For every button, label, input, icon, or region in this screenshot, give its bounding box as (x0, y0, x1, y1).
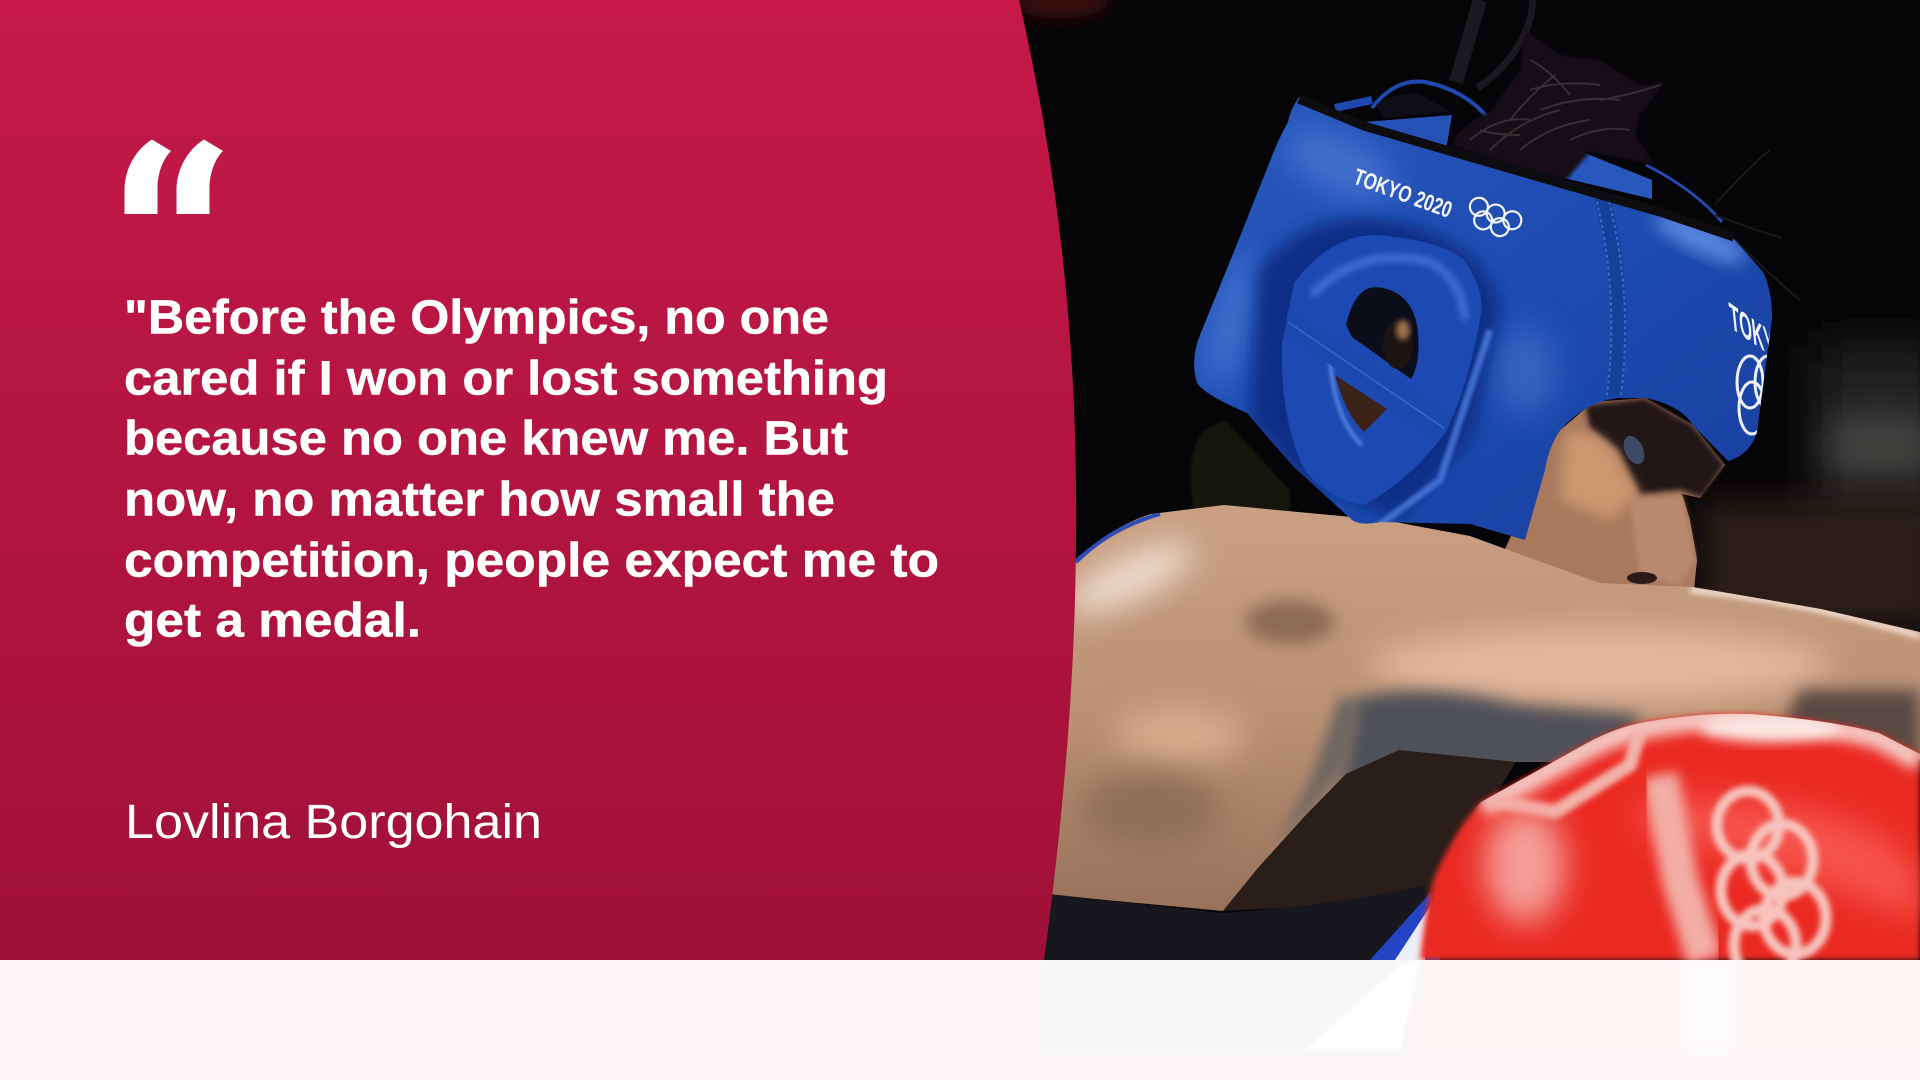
red glove (1420, 714, 1920, 981)
torso and arm (1030, 505, 1920, 911)
photo background (1000, 0, 1920, 960)
quote text: because no one knew me. But (124, 412, 848, 466)
TOKYO text on side: TOKYO (1727, 294, 1789, 376)
face (1500, 398, 1725, 600)
quote text: get a medal. (124, 594, 421, 648)
black vest (1040, 885, 1425, 960)
attribution: Lovlina Borgohain (125, 796, 542, 849)
Olympic rings (1468, 196, 1522, 238)
icon: quotation mark (124, 140, 223, 214)
bottom strip (0, 960, 1920, 1080)
quote text: cared if I won or lost something (124, 352, 888, 406)
quote text: competition, people expect me to (124, 534, 939, 588)
Olympic rings on side (1736, 354, 1768, 436)
blue headgear (1194, 97, 1789, 540)
quote text: now, no matter how small the (124, 474, 835, 526)
back hair (1191, 422, 1289, 511)
shadow behind arm (1223, 750, 1516, 911)
photo: boxer in blue headgear (1000, 0, 1920, 981)
jersey stripe (1370, 892, 1440, 960)
headgear straps and hair (1335, 0, 1800, 300)
TOKYO 2020 text: TOKYO 2020 (1350, 165, 1455, 223)
quote text: "Before the Olympics, no one (124, 292, 829, 344)
quote text (124, 292, 939, 648)
red quote panel (0, 0, 1076, 960)
ear pad (1282, 235, 1482, 505)
